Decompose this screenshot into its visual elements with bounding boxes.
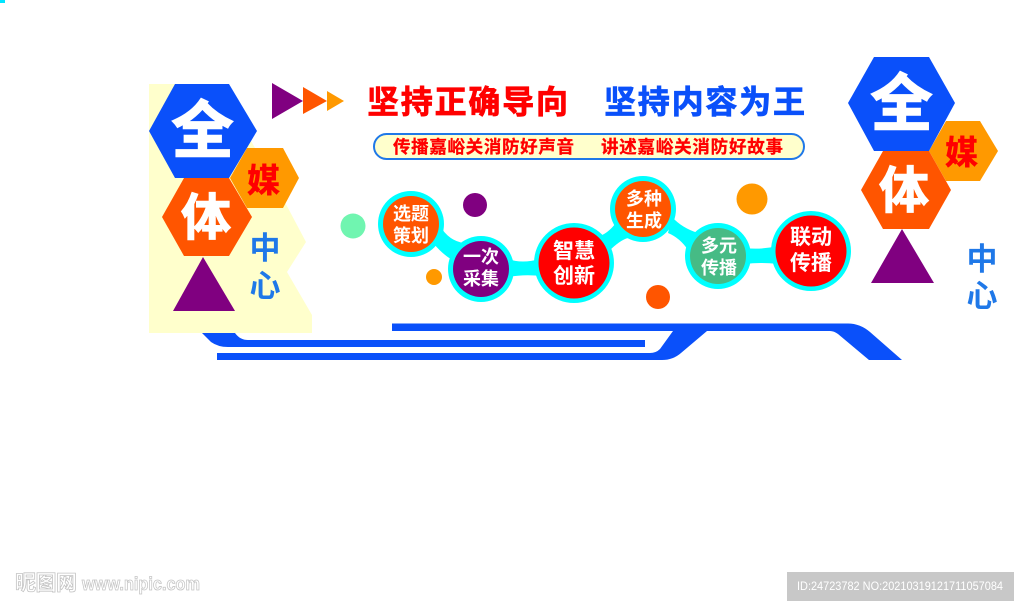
hexagon: 全	[848, 57, 955, 151]
step: 选题策划: 选题	[393, 204, 429, 224]
heading: red slogan: 坚持正确导向	[367, 84, 568, 120]
watermark: nipic logo: www.nipic.com	[81, 574, 200, 594]
hexagon: 媒	[230, 148, 299, 208]
flow chart: media workflow	[378, 176, 851, 303]
step: 多种生成	[610, 176, 676, 242]
text: 中心	[966, 242, 998, 314]
step: 多元传播: 传播	[701, 258, 737, 278]
hexagon: 媒	[929, 121, 998, 181]
step: 一次采集: 采集	[463, 269, 499, 289]
step: 选题策划	[378, 191, 444, 257]
hexagon: 全: 全	[870, 70, 933, 139]
icon: purple triangle	[871, 229, 934, 283]
hexagon: 体	[162, 178, 252, 256]
step: 智慧创新	[534, 223, 614, 303]
watermark: nipic logo: 昵图网	[15, 572, 77, 595]
text: 中心: 心	[250, 269, 280, 304]
hexagon: 全	[149, 84, 257, 178]
panel: left logo group	[149, 84, 312, 333]
text: 中心: 中	[966, 242, 998, 277]
step: 联动传播: 联动	[790, 226, 832, 249]
hexagon: 全: 全	[171, 97, 234, 166]
banner: subtitle pill	[374, 134, 804, 159]
decorative dots	[340, 184, 768, 309]
watermark: image id box	[787, 572, 1014, 601]
banner: subtitle pill: 讲述嘉峪关消防好故事	[601, 137, 783, 157]
step: 多种生成: 多种	[626, 189, 662, 209]
icon: triple arrows	[272, 83, 344, 119]
text: 中心: 中	[250, 231, 280, 266]
hexagon: 体: 体	[879, 163, 929, 219]
step: 选题策划: 策划	[393, 226, 429, 246]
hexagon: 体: 体	[181, 190, 231, 246]
step: 联动传播	[771, 211, 851, 291]
step: 智慧创新: 智慧	[553, 240, 595, 263]
watermark: nipic logo	[15, 572, 200, 595]
icon: purple triangle	[173, 257, 235, 311]
step: 一次采集: 一次	[463, 247, 499, 267]
step: 多种生成: 生成	[626, 210, 662, 231]
step: 一次采集	[448, 236, 514, 302]
step: 联动传播: 传播	[790, 252, 832, 275]
step: 智慧创新: 创新	[553, 264, 595, 288]
text: 中心	[250, 231, 280, 304]
panel: right logo group	[848, 57, 998, 314]
hexagon: 体	[861, 151, 951, 229]
decorative blue track lines	[202, 324, 902, 360]
hexagon: 媒: 媒	[247, 162, 280, 199]
step: 多元传播: 多元	[701, 236, 737, 256]
banner: subtitle pill: 传播嘉峪关消防好声音	[393, 137, 574, 157]
text: 中心: 心	[966, 279, 998, 314]
heading: blue slogan: 坚持内容为王	[604, 84, 805, 120]
step: 多元传播	[685, 223, 751, 289]
hexagon: 媒: 媒	[945, 134, 978, 171]
watermark: image id box: ID:24723782 NO:20210319121711057084	[797, 581, 1004, 593]
